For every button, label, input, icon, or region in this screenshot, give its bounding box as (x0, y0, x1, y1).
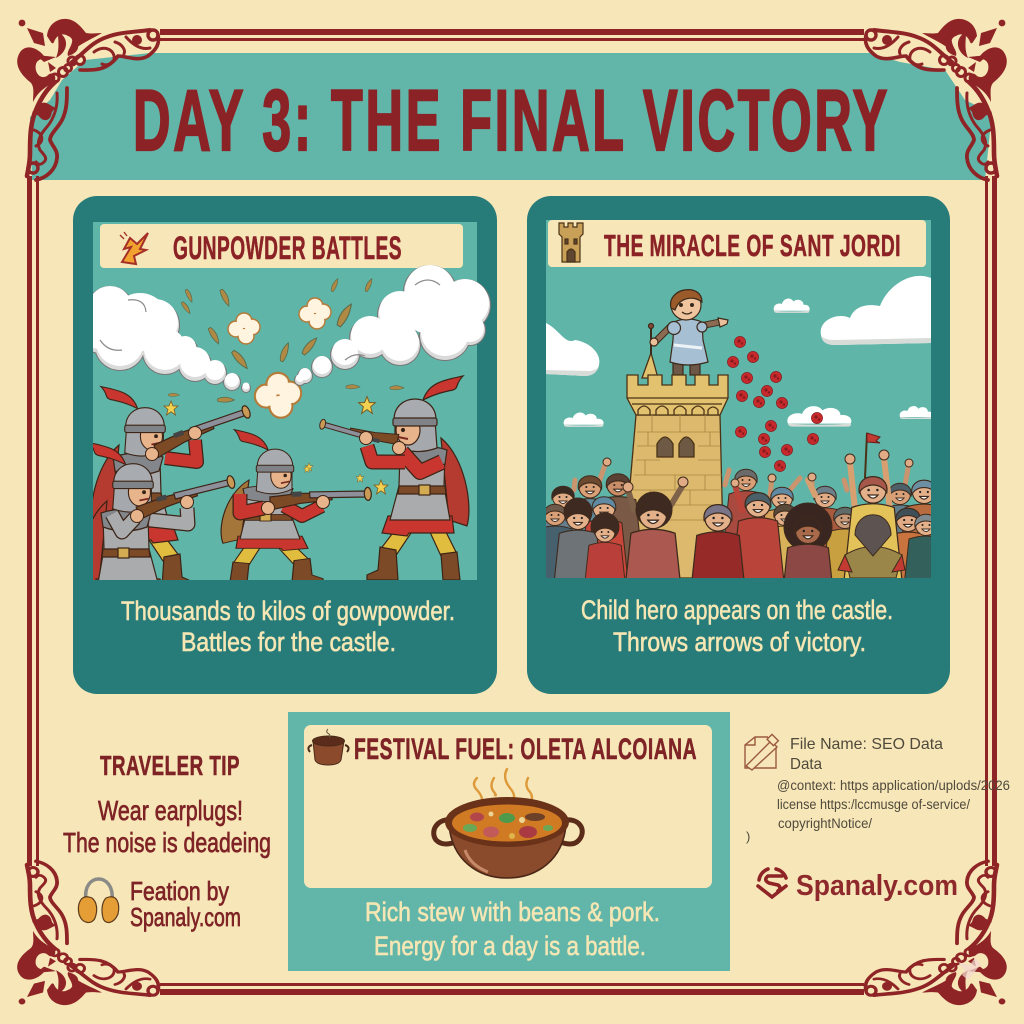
tip heading: TRAVELER TIP (100, 750, 240, 781)
caption: Thousands to kilos of gowpowder. (121, 596, 455, 626)
soldier centre (221, 430, 372, 582)
soldier right (319, 376, 469, 580)
caption: Battles for the castle. (181, 627, 396, 657)
brand name: Spanaly.com (796, 870, 958, 902)
header bar (100, 224, 463, 268)
panel: festival fuel (288, 712, 730, 971)
castle tower (622, 375, 728, 578)
metadata lines: copyrightNotice/ (778, 816, 872, 831)
metadata lines: @context: https application/uplods/2026 (777, 778, 1010, 793)
header bar (548, 220, 926, 267)
falling roses (727, 336, 823, 472)
panel: traveler tip (63, 750, 271, 932)
tip text (63, 795, 271, 858)
metadata lines: license https:/lccmusge of-service/ (777, 797, 970, 812)
file name: Data (790, 756, 822, 773)
credit (130, 876, 241, 932)
corner highlight (958, 958, 981, 980)
icon: file and pen (745, 734, 778, 770)
illustration: battle scene (93, 222, 477, 580)
file name: File Name: SEO Data (790, 736, 943, 753)
tip text: Wear earplugs! (98, 795, 243, 826)
metadata lines (746, 778, 1010, 844)
crowd (546, 450, 931, 578)
metadata lines: ) (746, 829, 750, 844)
icon: castle tower (559, 223, 583, 262)
heading: FESTIVAL FUEL: OLETA ALCOIANA (354, 733, 697, 766)
title banner (30, 53, 992, 180)
heading: GUNPOWDER BATTLES (173, 230, 402, 266)
credit: Feation by (130, 876, 229, 906)
panel: file metadata (745, 734, 1010, 902)
file name (790, 736, 943, 773)
red flag (865, 433, 880, 478)
caption: Throws arrows of victory. (613, 627, 866, 657)
icon: ear defenders (78, 879, 119, 923)
spire (642, 353, 658, 378)
caption: Energy for a day is a battle. (374, 931, 646, 961)
caption (365, 897, 660, 961)
illustration: tower and crowd (546, 220, 931, 578)
soldier upper left (91, 387, 253, 587)
smoke cloud right (295, 265, 490, 385)
caption (581, 595, 893, 657)
helmeted figure from behind (838, 515, 905, 578)
smoke cloud left (82, 286, 250, 392)
credit: Spanaly.com (130, 902, 241, 932)
panel: miracle of sant jordi (527, 196, 950, 694)
logo mark (758, 869, 786, 897)
panel: gunpowder battles (73, 196, 497, 694)
caption: Rich stew with beans & pork. (365, 897, 660, 927)
icon: explosion (120, 232, 148, 264)
caption (121, 596, 455, 657)
flying sparks and stars (164, 278, 404, 494)
soldier lower left (93, 442, 236, 580)
muzzle puffs (228, 298, 331, 418)
icon: small pot (308, 729, 349, 765)
illustration: stew pot (434, 769, 582, 878)
sky clouds (546, 276, 934, 427)
caption: Child hero appears on the castle. (581, 595, 893, 625)
tip text: The noise is deadeing (63, 827, 271, 858)
child hero (648, 290, 728, 375)
